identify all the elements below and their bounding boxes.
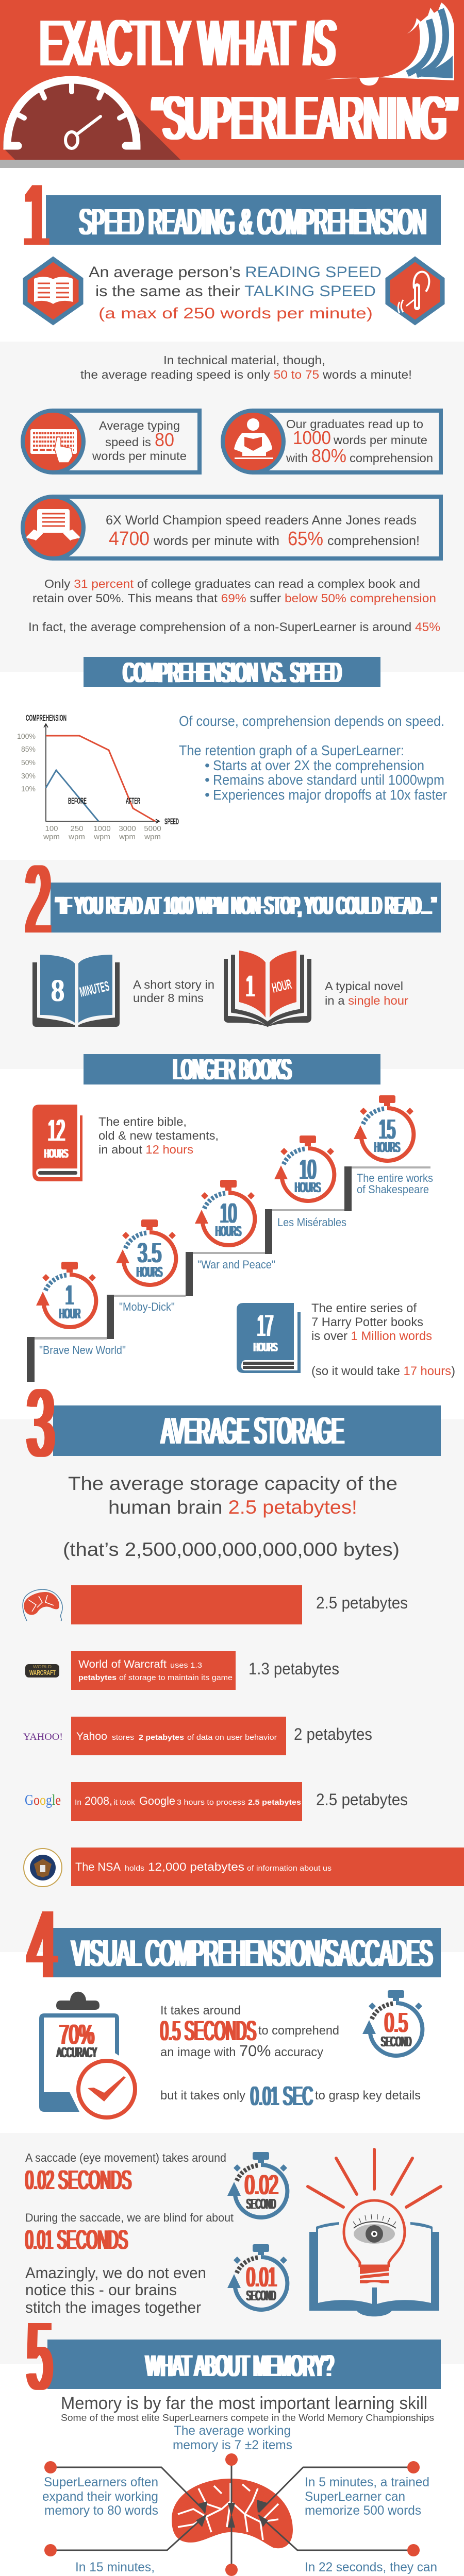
icon: speedometer: [3, 76, 180, 160]
intro text: An average person’s READING SPEED: [89, 264, 382, 281]
stopwatch: 15 hours Shakespeare: The entire works: [357, 1172, 433, 1184]
section 1 heading: [24, 166, 441, 263]
text: 0.5 seconds: It takes around: [160, 2004, 241, 2018]
text: 0.01 sec: [160, 2081, 421, 2111]
icon: book 12 hours: 12: [48, 1114, 65, 1147]
line chart: comprehension vs speed: wpm: [119, 833, 136, 841]
section 3 heading: [27, 1370, 441, 1477]
text: 0.5 seconds: 0.5 SECONDS: [160, 2015, 256, 2046]
text: 15 minutes: In 15 minutes,: [75, 2560, 155, 2574]
text: memory intro: Some of the most elite SuperLearners compete in the World Memory Championships: [61, 2413, 434, 2423]
line chart: comprehension vs speed: wpm: [43, 833, 60, 841]
header panel: [0, 0, 464, 168]
icon: clipboard 70% accuracy: [39, 1992, 135, 2117]
section 5 heading: [27, 2303, 441, 2410]
line chart: comprehension vs speed: 100: [45, 824, 58, 833]
bar: World of Warcraft: 1.3 petabytes: [248, 1659, 339, 1678]
technical material text: the average reading speed is only 50 to 75 words a minute!: [80, 368, 412, 381]
text: SuperLearners working memory: [42, 2475, 158, 2518]
panel: world champion: 6X World Champion speed readers Anne Jones reads: [106, 513, 417, 528]
panel: graduates speed: Our graduates read up to: [286, 417, 423, 431]
bar: human brain: [23, 1585, 408, 1624]
comprehension statistics text: retain over 50%. This means that 69% suffer below 50% comprehension: [32, 591, 436, 605]
bar: Google: 2.5 petabytes: [316, 1790, 408, 1809]
comprehension statistics text: [28, 577, 440, 634]
panel: world champion: words per minute with: [153, 534, 279, 548]
text: saccades: notice this - our brains: [25, 2281, 177, 2299]
text: saccades: 0.02 SECONDS: [25, 2165, 131, 2195]
stopwatch: 10 hours Les Miserables: [274, 1136, 346, 1229]
bar: Google: 2.5 petabytes: [248, 1798, 301, 1807]
icon: clipboard 70% accuracy: 70%: [59, 2019, 94, 2050]
panel: world champion: 4700: [109, 528, 150, 550]
panel: graduates speed: [223, 411, 441, 472]
text: 15 minutes: [47, 2560, 158, 2576]
panel: world champion: comprehension!: [327, 534, 420, 548]
text: Harry Potter: 7 Harry Potter books: [311, 1315, 423, 1329]
bar: human brain: 2.5 petabytes: [316, 1594, 408, 1612]
stopwatch: 10 hours Les Miserables: Les Misérables: [277, 1216, 346, 1229]
bar: Yahoo: 2 petabytes: [294, 1725, 372, 1743]
line chart: comprehension vs speed: 1000: [93, 824, 111, 833]
icon: keyboard: [30, 429, 77, 463]
text: SuperLearners working memory: SuperLearners often: [44, 2475, 158, 2489]
stopwatch: 0.01 second: SECOND: [246, 2287, 276, 2303]
intro text: [89, 264, 382, 322]
retention graph text: Starts at over 2X the comprehension: [213, 757, 424, 773]
stopwatch: 0.5 second: 0.5: [385, 2007, 408, 2038]
line chart: comprehension vs speed: [17, 713, 179, 841]
icon: NSA seal: [24, 1849, 62, 1887]
retention graph text: •: [205, 787, 210, 803]
line chart: comprehension vs speed: 100%: [17, 732, 36, 741]
section 3 heading: 3: [27, 1370, 54, 1477]
technical material text: In technical material, though,: [163, 353, 325, 367]
stopwatch: 15 hours Shakespeare: of Shakespeare: [357, 1183, 429, 1196]
icon: hexagon talking: [388, 259, 442, 323]
text: memory intro: The average working: [174, 2424, 291, 2438]
line chart: comprehension vs speed: 50%: [21, 758, 36, 767]
text: typical novel: A typical novel: [325, 979, 403, 993]
text: 5 minutes: [305, 2475, 429, 2518]
panel: typing speed: Average typing: [99, 419, 180, 432]
stopwatch: 10 hours War and Peace: 10: [220, 1198, 237, 1229]
bar: World of Warcraft: uses 1.3: [170, 1661, 202, 1670]
bar: World of Warcraft: [25, 1651, 339, 1690]
bar: Google: 2008,: [85, 1794, 112, 1807]
bar: World of Warcraft: of storage to maintain its game: [119, 1673, 233, 1682]
heading: comprehension vs speed: [84, 656, 380, 688]
icon: hexagon book: [25, 259, 81, 323]
text: entire bible: The entire bible,: [98, 1115, 187, 1128]
text: 0.5 seconds: [160, 2004, 339, 2060]
icon: book 17 hours: [237, 1303, 301, 1373]
icon: person reading: [234, 418, 273, 459]
text: 0.01 sec: 0.01 SEC: [251, 2081, 313, 2111]
bar: NSA: of information about us: [247, 1864, 332, 1873]
icon: Warcraft logo: [25, 1664, 59, 1677]
icon: clipboard 70% accuracy: ACCURACY: [57, 2044, 97, 2060]
panel: graduates speed: 80%: [311, 445, 346, 466]
panel: typing speed: words per minute: [92, 449, 187, 463]
icon: book 8 minutes: 8: [52, 974, 64, 1008]
text: storage capacity: (that’s 2,500,000,000,000,000 bytes): [63, 1539, 400, 1560]
stopwatch: 15 hours Shakespeare: 15: [379, 1114, 395, 1145]
text: saccades: [25, 2151, 234, 2316]
section 5 heading: 5: [27, 2303, 52, 2410]
stopwatch: 0.01 second: [227, 2244, 287, 2310]
comprehension statistics text: In fact, the average comprehension of a non-SuperLearner is around 45%: [28, 620, 440, 634]
section 2 heading: [26, 845, 441, 953]
stopwatch: 0.02 second: 0.02: [245, 2170, 278, 2200]
text: short story: A short story in: [133, 978, 214, 991]
stopwatch: 15 hours Shakespeare: [354, 1095, 433, 1196]
section 1 heading: 1: [24, 166, 48, 263]
intro text: (a max of 250 words per minute): [98, 305, 373, 322]
text: short story: [133, 978, 214, 1005]
line chart: comprehension vs speed: COMPREHENSION: [26, 713, 67, 723]
stopwatch: 0.5 second: [362, 1990, 422, 2056]
line chart: comprehension vs speed: 3000: [119, 824, 136, 833]
text: 5 minutes: SuperLearner can: [305, 2489, 405, 2504]
line chart: comprehension vs speed: 5000: [144, 824, 161, 833]
heading: longer books: LONGER BOOKS: [173, 1053, 291, 1086]
icon: book 1 hour: [224, 951, 311, 1027]
section 4 heading: [28, 1891, 441, 1998]
bar: Google: it took: [113, 1798, 136, 1807]
bar: Yahoo: [23, 1717, 372, 1755]
icon: book 12 hours: HOURS: [44, 1147, 68, 1161]
heading: longer books: [84, 1053, 380, 1086]
text: storage capacity: The average storage capacity of the: [68, 1473, 397, 1494]
bar: Yahoo: Yahoo: [76, 1731, 107, 1742]
text: memory intro: memory is 7 ±2 items: [173, 2438, 292, 2452]
section 2 heading: 2: [26, 845, 51, 953]
stopwatch: 10 hours Les Miserables: HOURS: [295, 1179, 321, 1195]
bar: Yahoo: stores: [112, 1733, 134, 1742]
stopwatch: 0.02 second: SECOND: [246, 2196, 276, 2212]
stopwatch: 1 hour Brave New World: HOUR: [59, 1306, 80, 1321]
text: short story: under 8 mins: [133, 991, 204, 1005]
text: entire bible: [98, 1115, 219, 1156]
stopwatch: 15 hours Shakespeare: HOURS: [374, 1139, 400, 1155]
line chart: comprehension vs speed: wpm: [93, 833, 110, 841]
text: Harry Potter: [311, 1301, 455, 1378]
bar: Google: [25, 1782, 408, 1821]
bar: Google: Google: [139, 1794, 175, 1807]
panel: graduates speed: comprehension: [350, 451, 433, 465]
retention graph text: •: [205, 757, 210, 773]
section 4 heading: 4: [28, 1891, 57, 1998]
retention graph text: The retention graph of a SuperLearner:: [179, 742, 404, 758]
text: SuperLearners working memory: memory to 80 words: [44, 2503, 158, 2518]
text: typical novel: [325, 979, 408, 1007]
icon: light bulb eye over book: [308, 2149, 441, 2316]
panel: typing speed: speed is: [105, 435, 151, 449]
bar: NSA: holds: [125, 1864, 144, 1873]
icon: Warcraft logo: WORLD: [33, 1665, 52, 1669]
retention graph text: [179, 713, 447, 803]
text: 0.01 sec: but it takes only: [160, 2089, 245, 2103]
panel: graduates speed: words per minute: [333, 433, 427, 447]
text: entire bible: in about 12 hours: [98, 1143, 193, 1156]
bar: Google: 3 hours to process: [177, 1798, 245, 1807]
stopwatch: 1 hour Brave New World: 1: [65, 1280, 74, 1311]
bar: World of Warcraft: petabytes: [78, 1673, 117, 1682]
line chart: comprehension vs speed: BEFORE: [68, 796, 87, 806]
text: SPEED: [164, 817, 179, 826]
stopwatch: 0.5 second: SECOND: [381, 2033, 411, 2049]
stopwatch: 10 hours War and Peace: "War and Peace": [197, 1258, 275, 1271]
technical material text: [80, 353, 412, 381]
icon: brain: [172, 2479, 293, 2548]
icon: book 1 hour: 1: [246, 970, 255, 1003]
stopwatch: 10 hours War and Peace: [195, 1180, 275, 1271]
icon: book 8 minutes: MINUTES: [78, 978, 111, 1000]
text: saccades: During the saccade, we are blind for about: [25, 2211, 234, 2224]
stopwatch: 3.5 hours Moby-Dick: 3.5: [138, 1238, 161, 1268]
line chart: comprehension vs speed: wpm: [144, 833, 161, 841]
stopwatch: 10 hours Les Miserables: 10: [300, 1154, 316, 1185]
brain memory diagram: [44, 2453, 420, 2576]
panel: graduates speed: 1000: [293, 427, 331, 448]
icon: Yahoo logo: YAHOO!: [23, 1732, 63, 1742]
text: 5 minutes: In 5 minutes, a trained: [305, 2475, 429, 2489]
comprehension statistics text: Only 31 percent of college graduates can read a complex book and: [44, 577, 420, 590]
text: 0.5 seconds: an image with 70% accuracy: [160, 2042, 323, 2060]
text: 0.01 sec: to grasp key details: [315, 2089, 421, 2103]
bar: Google: In: [75, 1798, 81, 1807]
stopwatch: 10 hours War and Peace: HOURS: [216, 1223, 241, 1239]
text: storage capacity: human brain 2.5 petabytes!: [108, 1497, 357, 1518]
bar: Yahoo: 2 petabytes: [139, 1733, 184, 1742]
panel: typing speed: [23, 411, 200, 472]
panel: typing speed: 80: [155, 429, 174, 450]
retention graph text: Remains above standard until 1000wpm: [213, 772, 444, 788]
text: Harry Potter: (so it would take 17 hours): [311, 1364, 455, 1378]
stopwatch: 3.5 hours Moby-Dick: [116, 1219, 176, 1313]
text: 22 seconds: In 22 seconds, they can: [305, 2560, 437, 2574]
retention graph text: •: [205, 772, 210, 788]
line chart: comprehension vs speed: wpm: [68, 833, 85, 841]
text: Harry Potter: is over 1 Million words: [311, 1329, 432, 1343]
icon: Google logo: Google: [25, 1792, 61, 1808]
text: Harry Potter: The entire series of: [311, 1301, 417, 1315]
line chart: comprehension vs speed: 10%: [21, 785, 36, 793]
title: [40, 7, 457, 152]
text: 0.5 seconds: to comprehend: [258, 2024, 339, 2038]
bar: NSA: [24, 1848, 464, 1887]
icon: book 8 minutes: [32, 955, 120, 1027]
text: saccades: A saccade (eye movement) takes around: [25, 2151, 226, 2164]
line chart: comprehension vs speed: AFTER: [126, 796, 140, 806]
icon: flipping book: [325, 3, 454, 86]
stopwatch: 1 hour Brave New World: [36, 1262, 126, 1357]
text: memory intro: [61, 2394, 434, 2452]
panel: world champion: 65%: [288, 528, 323, 550]
text: typical novel: in a single hour: [325, 994, 408, 1007]
icon: book 1 hour: HOUR: [271, 976, 293, 996]
text: storage capacity: [63, 1473, 400, 1560]
line chart: comprehension vs speed: 85%: [21, 745, 36, 754]
text: entire bible: old & new testaments,: [98, 1129, 219, 1142]
line chart: comprehension vs speed: 30%: [21, 772, 36, 781]
icon: tablet in hands: [27, 509, 79, 540]
text: saccades: 0.01 SECONDS: [25, 2225, 128, 2255]
stopwatch: 1 hour Brave New World: "Brave New World": [39, 1344, 126, 1357]
bar: Yahoo: of data on user behavior: [187, 1733, 277, 1742]
bar: World of Warcraft: World of Warcraft: [78, 1658, 167, 1670]
bar: NSA: The NSA: [75, 1860, 121, 1873]
stopwatch: 0.02 second: [227, 2152, 287, 2217]
text: memory intro: Memory is by far the most important learning skill: [61, 2394, 427, 2413]
text: saccades: Amazingly, we do not even: [25, 2264, 206, 2282]
icon: head with brain: [23, 1589, 62, 1621]
icon: book 17 hours: 17: [257, 1309, 273, 1343]
staircase steps: [27, 1166, 430, 1382]
panel: world champion: [23, 497, 441, 558]
line chart: comprehension vs speed: 250: [70, 824, 84, 833]
icon: book 12 hours: [32, 1105, 82, 1181]
stopwatch: 3.5 hours Moby-Dick: "Moby-Dick": [119, 1300, 175, 1313]
stopwatch: 0.01 second: 0.01: [246, 2262, 277, 2293]
intro text: is the same as their TALKING SPEED: [95, 283, 376, 300]
icon: Warcraft logo: WARCRAFT: [29, 1669, 56, 1676]
text: saccades: stitch the images together: [25, 2298, 201, 2316]
icon: book 17 hours: HOURS: [254, 1341, 277, 1354]
panel: graduates speed: with: [286, 451, 308, 465]
stopwatch: 3.5 hours Moby-Dick: HOURS: [137, 1264, 162, 1280]
text: SuperLearners working memory: expand their working: [42, 2489, 158, 2504]
bar: NSA: 12,000 petabytes: [148, 1860, 244, 1873]
text: 5 minutes: memorize 500 words: [305, 2503, 421, 2518]
